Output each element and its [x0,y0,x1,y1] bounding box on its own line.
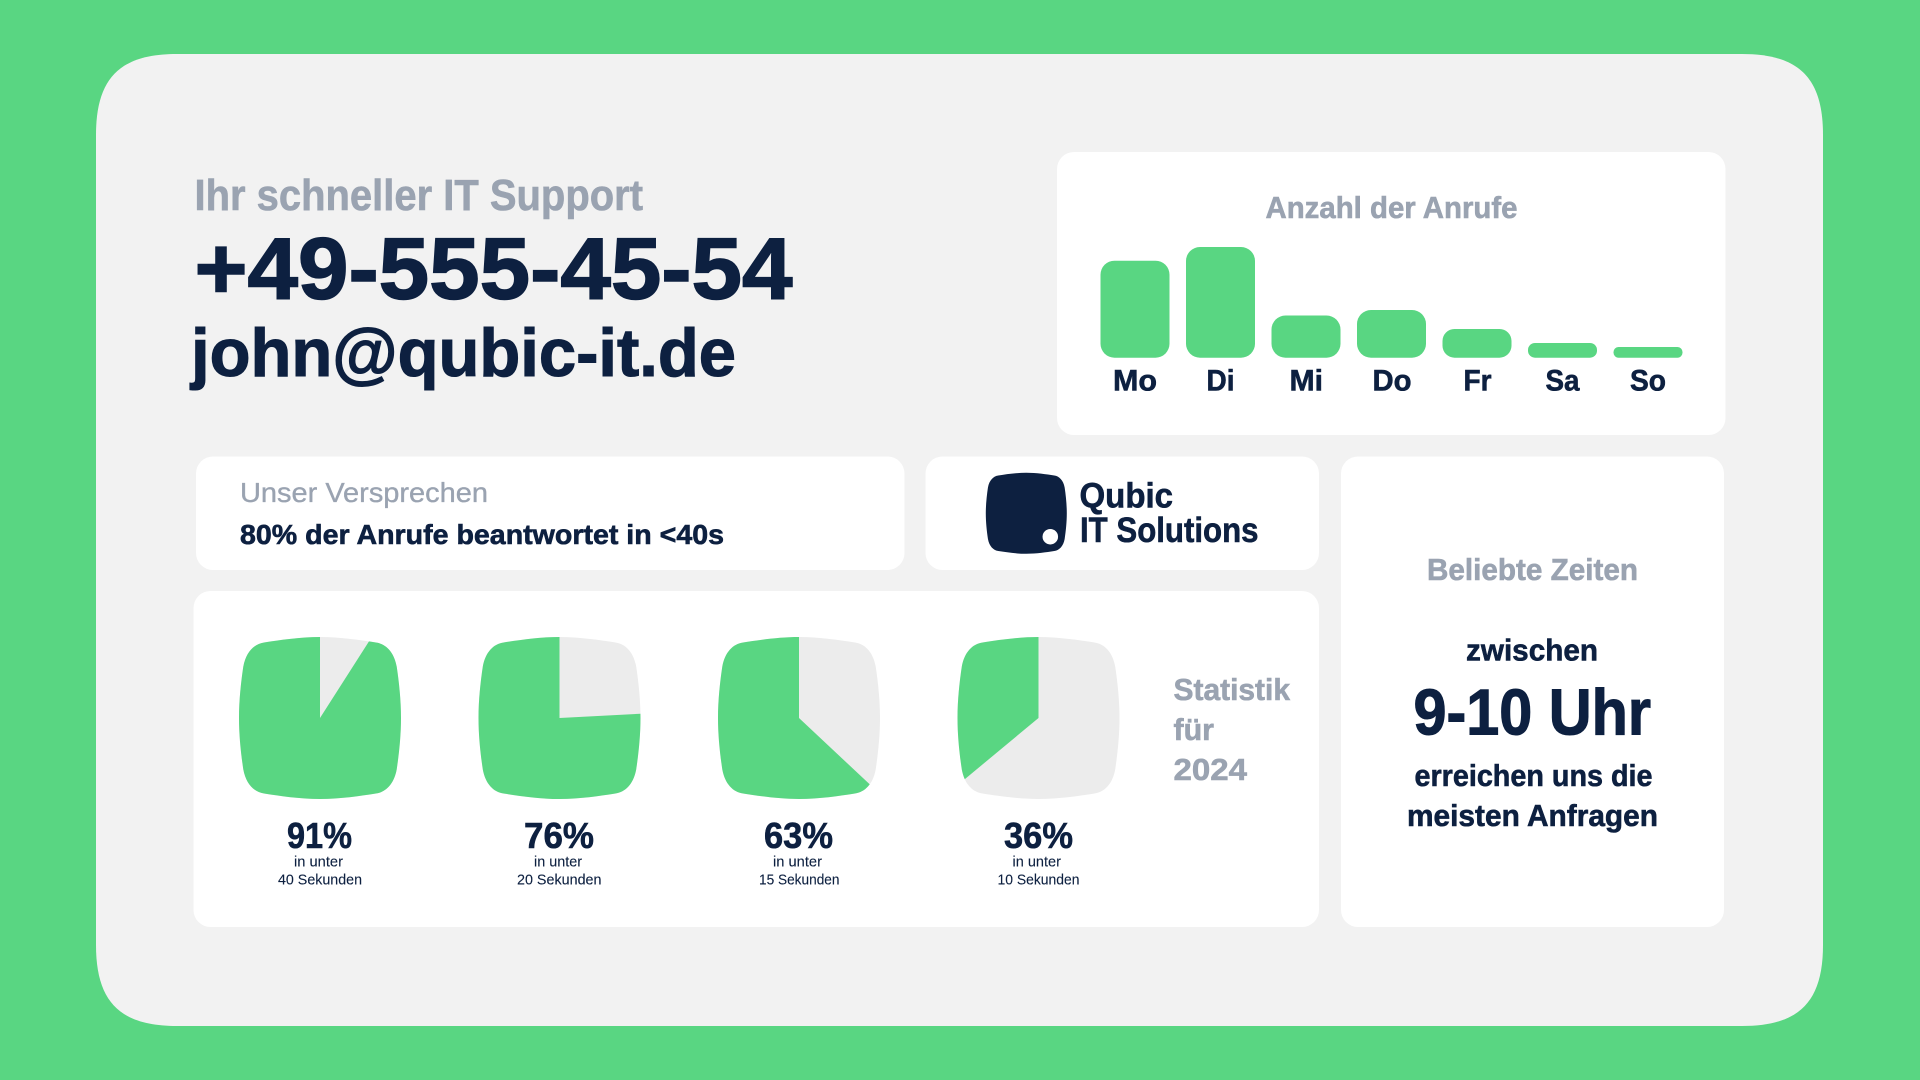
statistics caption: für [1174,712,1214,747]
weekday labels: Mo [1113,365,1157,398]
pie: 76% [478,637,640,799]
company name: Qubic [1080,476,1173,516]
promise heading: Unser Versprechen [240,477,488,508]
stat: 36%: 10 Sekunden [998,872,1080,889]
weekday labels: Mi [1290,365,1323,398]
pie: 63% [718,637,880,799]
closing text: meisten Anfragen [1407,798,1658,833]
statistics caption [1174,672,1291,787]
weekday labels: Sa [1546,365,1580,398]
weekday labels: Di [1206,365,1234,398]
panel: calls per weekday [1057,152,1726,435]
weekday labels: So [1630,365,1666,398]
stat: 63% [759,815,840,889]
panel: logo [926,456,1319,570]
panel: promise [196,456,904,570]
statistics caption: Statistik [1174,672,1291,707]
stat: 63%: 63% [764,815,833,856]
weekday labels: Do [1372,365,1412,398]
stat: 63%: in unter [773,854,822,871]
company name: IT Solutions [1080,511,1258,550]
stat: 91% [278,815,362,889]
tagline: Ihr schneller IT Support [194,171,643,220]
panel: statistics [194,591,1319,927]
stat: 76%: 76% [524,815,594,856]
popular times heading: Beliebte Zeiten [1427,552,1638,587]
stat: 36% [998,815,1080,889]
weekday labels [1113,365,1666,398]
icon: Qubic logo mark [986,473,1067,554]
email address: john@qubic-it.de [189,315,736,391]
lead-in text: zwischen [1466,633,1598,668]
promise text: 80% der Anrufe beantwortet in <40s [240,519,724,550]
phone number: +49-555-45-54 [194,220,792,318]
peak time: 9-10 Uhr [1414,676,1651,748]
stat: 36%: 36% [1004,815,1073,856]
closing text [1407,758,1658,833]
stat: 91%: in unter [294,854,343,871]
pie: 36% [958,637,1120,799]
stat: 76%: in unter [534,854,582,871]
stat: 76%: 20 Sekunden [517,872,602,889]
weekday labels: Fr [1464,365,1492,398]
bar chart [1100,247,1682,358]
stat: 36%: in unter [1012,854,1061,871]
stat: 76% [517,815,602,889]
company name [1080,476,1258,550]
header: contact details [189,171,792,391]
stat: 63%: 15 Sekunden [759,872,840,889]
panel: popular times [1341,456,1724,927]
chart title: Anzahl der Anrufe [1266,190,1518,225]
closing text: erreichen uns die [1414,758,1652,793]
pie: 91% [239,637,401,799]
statistics caption: 2024 [1174,752,1248,787]
stat: 91%: 91% [287,815,352,856]
stat: 91%: 40 Sekunden [278,872,362,889]
